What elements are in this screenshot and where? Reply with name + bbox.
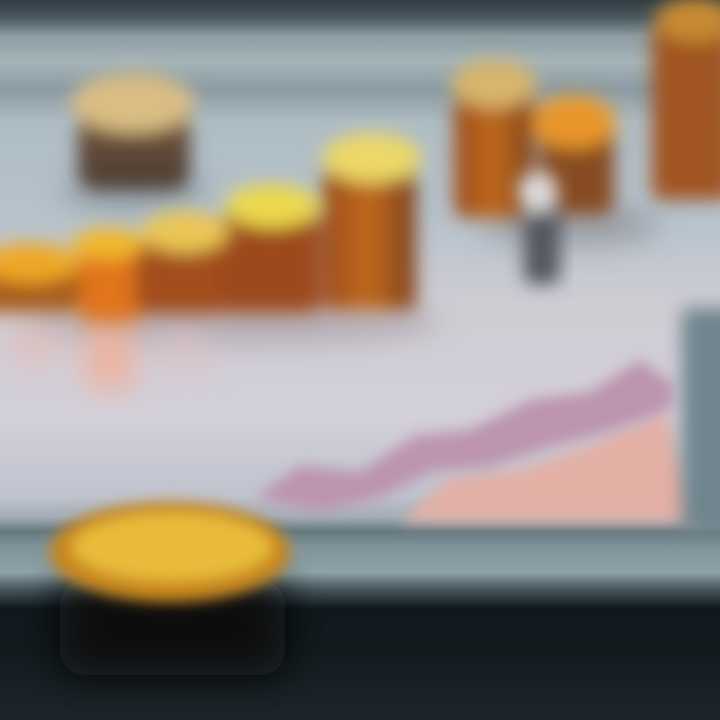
grey-blue object at right edge bbox=[682, 308, 720, 533]
pink reflections under coins bbox=[10, 320, 210, 390]
area chart: pink fill bbox=[400, 412, 700, 522]
area chart: mauve line bbox=[255, 360, 675, 512]
foreground gold coin bbox=[50, 502, 290, 675]
coin stacks: rising row bbox=[0, 133, 422, 322]
coin stack: upper left bbox=[71, 73, 195, 190]
small grey coin stack bbox=[518, 172, 560, 284]
coin stacks: upper right bbox=[451, 0, 720, 218]
stack shadows bbox=[20, 174, 660, 344]
